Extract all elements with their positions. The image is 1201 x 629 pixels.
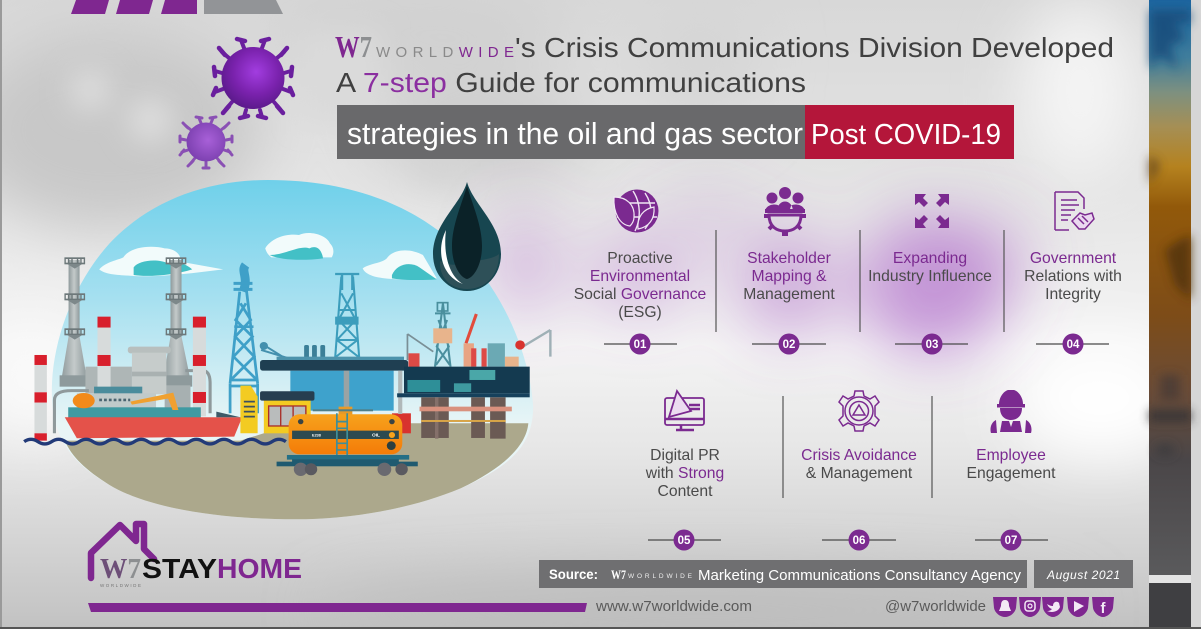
step 7: Engagement — [967, 465, 1056, 482]
social icons — [993, 597, 1114, 617]
date box — [1034, 560, 1133, 588]
icon: globe and leaf — [614, 190, 658, 232]
step 1: (ESG) — [618, 304, 662, 321]
logo: W7 WORLDWIDE — [335, 29, 514, 64]
storage tanks — [54, 347, 210, 433]
step 7: 07 — [1005, 535, 1017, 547]
blue flare tower — [230, 265, 258, 413]
step 1: Proactive — [607, 250, 673, 267]
social icons: f — [1100, 600, 1106, 617]
step 3: 03 — [926, 339, 938, 351]
waves — [24, 439, 286, 444]
stay home logo: STAY — [142, 553, 217, 584]
source box: WORLDWIDE — [628, 573, 693, 580]
title — [335, 29, 1114, 98]
red striped stacks — [34, 317, 206, 441]
tanker ship — [65, 387, 242, 438]
icon: document and handshake — [1055, 192, 1094, 230]
step 4: Integrity — [1045, 286, 1101, 303]
step 2: Mapping & — [752, 268, 827, 285]
clouds — [99, 233, 437, 280]
step 2: 02 — [783, 339, 795, 351]
step 7: Employee — [976, 447, 1046, 464]
icon: expanding arrows — [915, 194, 949, 228]
logo: W7 WORLDWIDE: WORLD WIDE — [376, 44, 514, 61]
oil rig — [397, 303, 550, 439]
step 5: 05 — [678, 535, 691, 547]
source box — [539, 560, 1027, 588]
step 1 — [574, 190, 707, 354]
icon: gear and warning — [839, 391, 879, 431]
date box: August 2021 — [1046, 568, 1120, 582]
title line 2: A 7-step Guide for communications — [336, 67, 806, 98]
icon: large virus — [213, 39, 293, 118]
step 6: & Management — [806, 465, 913, 482]
stay home logo — [91, 524, 302, 588]
step 4: 04 — [1067, 339, 1080, 351]
step 5: Content — [658, 483, 713, 500]
orange tank wagon — [277, 407, 418, 476]
step 7 — [967, 390, 1056, 550]
title banner: strategies in the oil and gas sector — [347, 116, 803, 151]
step 2: Management — [743, 286, 835, 303]
icon: worker with hard hat — [991, 390, 1031, 433]
step 1: Social Governance — [574, 286, 706, 303]
title line 1: 's Crisis Communications Division Developed — [515, 32, 1114, 63]
step 6 — [801, 391, 917, 550]
footer bar — [88, 603, 587, 612]
source box: W7 — [611, 567, 626, 582]
step 3: Industry Influence — [868, 268, 992, 285]
icon: small virus — [180, 117, 232, 168]
icon: people and gear — [764, 187, 806, 234]
stay home logo: HOME — [217, 553, 302, 584]
step 5: with Strong — [646, 465, 724, 482]
ground — [65, 423, 528, 519]
illustration: oil and gas scene — [24, 180, 550, 519]
sky blob — [52, 180, 533, 519]
step 2 — [743, 187, 835, 354]
icon: house — [91, 524, 154, 578]
social handle: @w7worldwide — [885, 599, 986, 615]
step 5 — [645, 391, 724, 550]
steps — [574, 187, 1122, 550]
top logo fragment — [71, 0, 283, 14]
website: www.w7worldwide.com — [595, 599, 752, 615]
bottom frame edge — [0, 627, 1201, 629]
step 2: Stakeholder — [747, 250, 831, 267]
icon: oil drop — [433, 182, 501, 291]
source box: Source: — [549, 566, 598, 582]
title banner: Post COVID-19 — [811, 119, 1001, 151]
icon: monitor and megaphone — [665, 391, 704, 430]
refinery towers — [60, 257, 192, 415]
step 1: 01 — [634, 339, 647, 351]
step 3: Expanding — [893, 250, 967, 267]
orange tank wagon: OIL — [372, 433, 380, 439]
step 6: 06 — [853, 535, 865, 547]
title banner — [337, 105, 1014, 159]
step 4: Government — [1030, 250, 1117, 267]
offshore platform — [260, 274, 408, 411]
source box: Marketing Communications Consultancy Agency — [698, 567, 1021, 584]
step 4 — [1024, 192, 1122, 354]
left frame edge — [0, 0, 2, 629]
step 5: Digital PR — [650, 447, 720, 464]
step 1: Environmental — [590, 268, 690, 285]
step 4: Relations with — [1024, 268, 1122, 285]
stay home logo: WORLDWIDE — [100, 583, 141, 588]
right image strip — [1149, 0, 1201, 627]
logo: W7 WORLDWIDE: W7 — [335, 29, 372, 64]
orange tank wagon: E238 — [312, 433, 321, 437]
step 6: Crisis Avoidance — [801, 447, 917, 464]
step 3 — [868, 194, 992, 354]
stay home logo: W7 — [100, 553, 141, 585]
yellow buildings — [240, 371, 411, 433]
